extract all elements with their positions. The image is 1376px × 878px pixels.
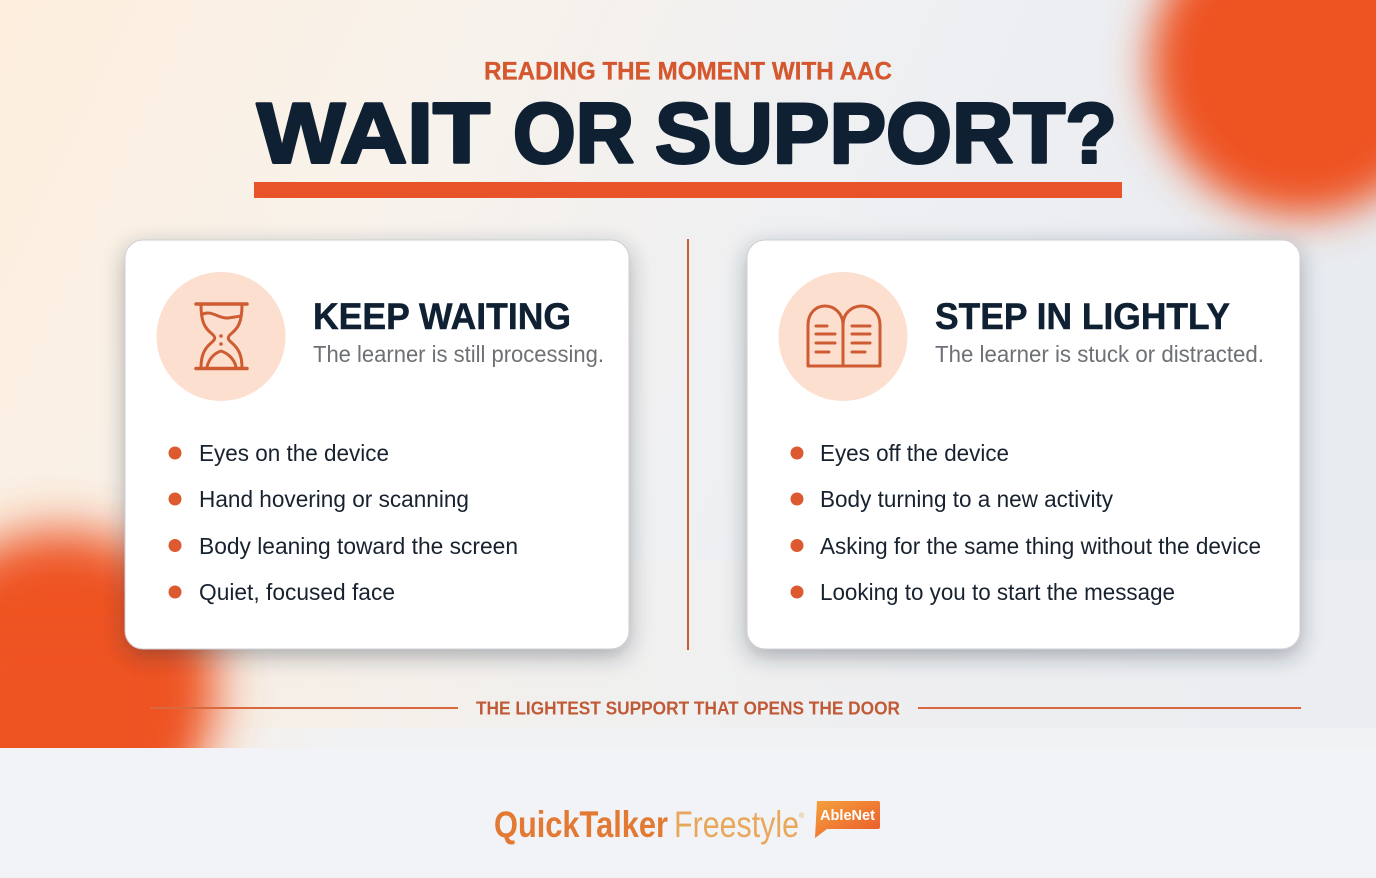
bullet list — [168, 440, 518, 605]
bullet list: Body leaning toward the screen — [199, 533, 518, 559]
logo: QuickTalker Freestyle: ® — [799, 812, 805, 820]
panel heading: STEP IN LIGHTLY — [935, 296, 1230, 337]
bullet list: Eyes on the device — [199, 440, 389, 466]
title: SUPPORT? — [655, 86, 1117, 182]
icon: open book — [778, 272, 908, 401]
logo: QuickTalker Freestyle: QuickTalker — [494, 804, 668, 845]
bullet list — [790, 440, 1261, 605]
decorative blob: top right — [1150, 0, 1376, 216]
icon: hourglass — [156, 272, 286, 401]
panel: step in lightly — [747, 240, 1300, 649]
panel subtitle: The learner is stuck or distracted. — [935, 341, 1264, 367]
logo: AbleNet tag: AbleNet — [820, 807, 875, 824]
logo: QuickTalker Freestyle — [494, 801, 880, 845]
bullet list: Asking for the same thing without the device — [820, 533, 1261, 559]
panel heading: KEEP WAITING — [313, 296, 571, 337]
logo: AbleNet tag — [815, 801, 880, 838]
panel subtitle: The learner is still processing. — [313, 341, 604, 367]
title: OR — [513, 86, 634, 182]
bullet list: Eyes off the device — [820, 440, 1009, 466]
bullet list: Hand hovering or scanning — [199, 486, 469, 512]
logo: QuickTalker Freestyle: Freestyle — [674, 804, 799, 845]
panel: keep waiting — [125, 240, 629, 649]
bottom caption: THE LIGHTEST SUPPORT THAT OPENS THE DOOR — [476, 698, 900, 718]
decorative blob: bottom left — [0, 530, 216, 838]
title: WAIT — [257, 86, 490, 182]
center divider — [687, 239, 689, 650]
bullet list: Looking to you to start the message — [820, 579, 1175, 605]
bullet list: Quiet, focused face — [199, 579, 395, 605]
title — [257, 86, 1117, 182]
eyebrow heading: READING THE MOMENT WITH AAC — [484, 58, 892, 86]
title underline — [254, 182, 1122, 198]
bullet list: Body turning to a new activity — [820, 486, 1113, 512]
